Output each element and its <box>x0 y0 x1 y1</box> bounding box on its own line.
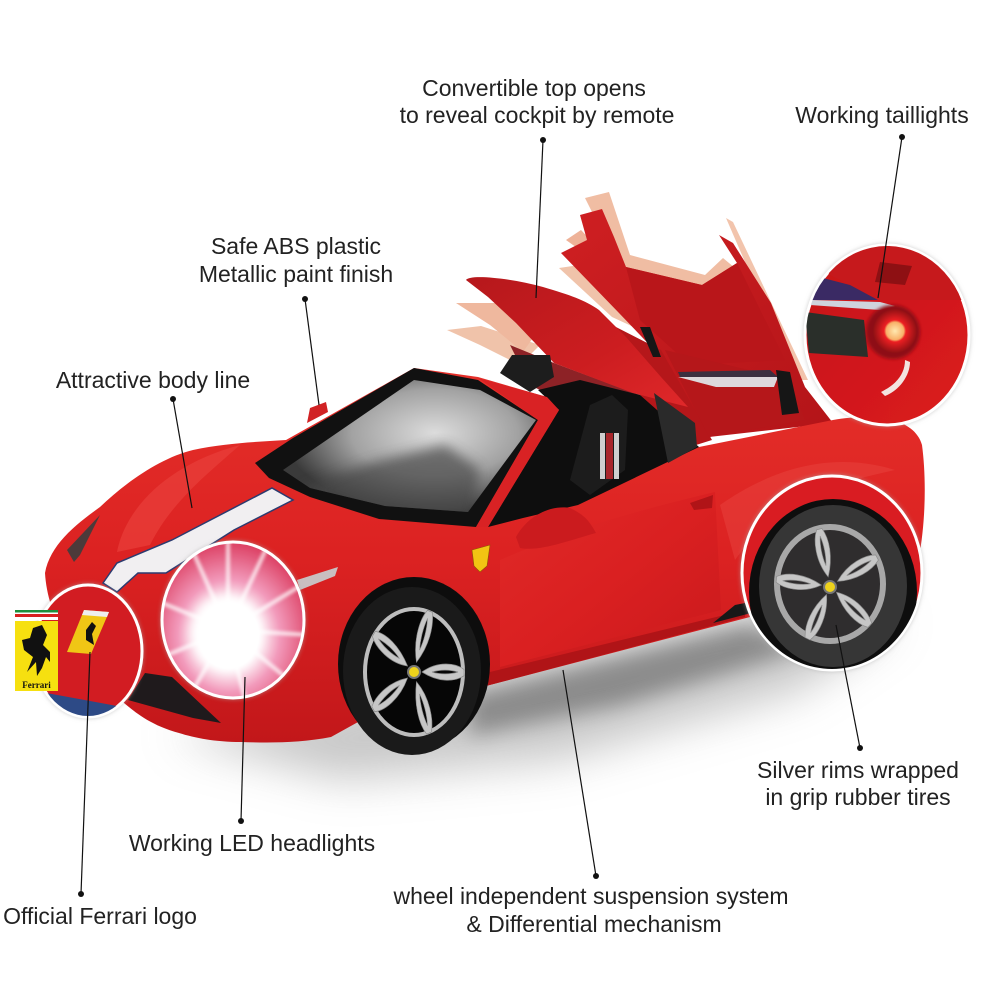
label: ABS plastic: Safe ABS plastic <box>211 233 381 259</box>
windshield glass <box>283 380 536 512</box>
side sill <box>482 610 745 687</box>
label: suspension: & Differential mechanism <box>466 911 722 937</box>
callout: logo circle <box>36 581 146 720</box>
convertible top motion ghosts <box>447 192 808 380</box>
side vent <box>297 567 338 590</box>
leader: headlights <box>238 677 245 824</box>
A pillar <box>476 378 559 527</box>
prancing horse <box>22 625 50 676</box>
door handle <box>690 495 713 510</box>
callout: rear wheel circle <box>742 476 922 685</box>
raised rear deck panel <box>561 209 833 437</box>
callout: taillight circle <box>800 240 970 425</box>
car badge <box>67 610 109 654</box>
label: rims: Silver rims wrapped <box>757 757 959 783</box>
leader: body line <box>170 396 192 508</box>
leader: ABS plastic <box>302 296 319 405</box>
rear wheel arch dark <box>850 470 905 515</box>
car body <box>45 368 925 742</box>
leader: logo <box>78 652 90 897</box>
hood white racing stripe <box>103 488 293 592</box>
label: body line: Attractive body line <box>56 367 250 393</box>
label: working taillights: Working taillights <box>795 102 969 128</box>
cockpit and seats <box>488 355 699 527</box>
space between top panels <box>600 325 712 450</box>
side mirror left <box>307 402 328 423</box>
hood bulge highlight <box>117 445 240 552</box>
label: rims: in grip rubber tires <box>765 784 951 810</box>
callout: headlight circle <box>155 540 310 700</box>
rear fender highlight <box>720 462 895 560</box>
label: suspension: wheel independent suspension system <box>392 883 789 909</box>
windshield frame <box>255 368 538 527</box>
leader: rims <box>836 625 863 751</box>
hood vent <box>67 515 100 562</box>
label: ABS plastic: Metallic paint finish <box>199 261 393 287</box>
side mirror right <box>516 507 596 549</box>
front grille <box>128 673 221 723</box>
label: LED headlights: Working LED headlights <box>129 830 375 856</box>
underbody dark <box>713 600 760 623</box>
panel inner shading <box>626 263 785 365</box>
leader: suspension <box>563 670 599 879</box>
ground shadow <box>170 610 900 780</box>
illustration: red convertible car <box>45 192 925 755</box>
interior below top panel <box>510 345 640 400</box>
engine bay and white cross bar <box>640 327 805 437</box>
windshield dashboard <box>300 445 480 520</box>
door logo badge <box>472 545 490 572</box>
Ferrari shield logo: Ferrari <box>22 680 51 690</box>
leader: taillights <box>878 134 905 298</box>
label: convertible top: to reveal cockpit by remote <box>400 102 674 128</box>
label: convertible top: Convertible top opens <box>422 75 646 101</box>
label: Ferrari logo: Official Ferrari logo <box>3 903 197 929</box>
Ferrari shield logo <box>15 610 58 691</box>
raised left top panel <box>466 277 688 407</box>
leader: convertible top <box>536 137 546 298</box>
side door panel <box>500 492 721 667</box>
front wheel <box>338 577 490 755</box>
